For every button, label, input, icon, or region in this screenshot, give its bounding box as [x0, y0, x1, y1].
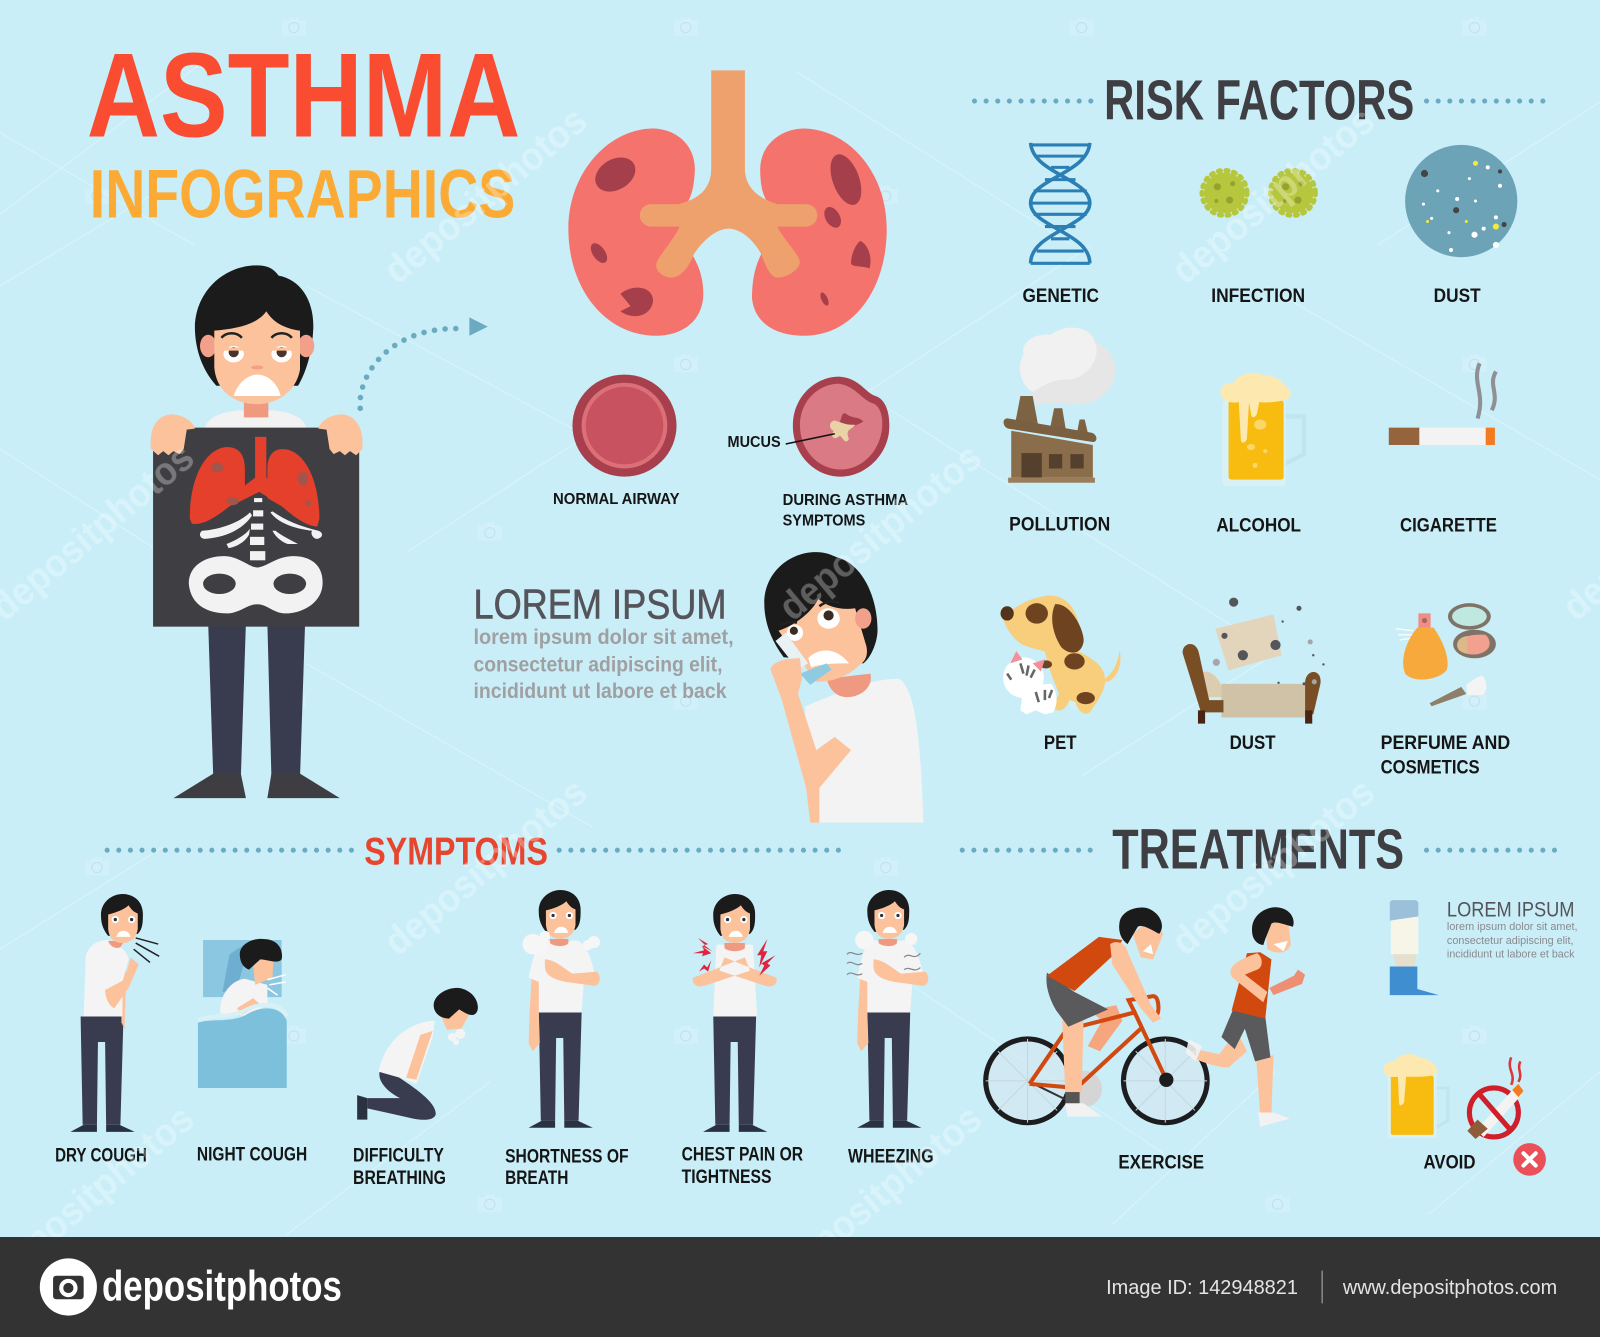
- shirt: [1047, 937, 1122, 991]
- logo camera: [40, 1258, 97, 1316]
- mattress: [1221, 684, 1305, 717]
- icon: perfume and cosmetics: COSMETICS: [1381, 757, 1480, 779]
- shorts: [1046, 973, 1108, 1027]
- dog markings: [1001, 603, 1095, 704]
- airway during asthma: DURING ASTHMA: [783, 492, 908, 509]
- icon: bed with pillow, dust: DUST: [1230, 732, 1276, 754]
- hands: [151, 414, 363, 455]
- symptom: night cough: NIGHT COUGH: [197, 1143, 307, 1165]
- icon: dust particles: DUST: [1434, 285, 1481, 307]
- dog head: [1003, 596, 1080, 657]
- icon: beer mug, alcohol: ALCOHOL: [1216, 515, 1301, 537]
- airway during asthma: MUCUS: [728, 434, 781, 451]
- symptom: difficulty breathing: [353, 988, 478, 1189]
- face: [779, 599, 867, 682]
- trachea and bronchi: [640, 70, 817, 278]
- mattress pillow: [1201, 672, 1221, 697]
- inhaler: [776, 633, 808, 670]
- website: www.depositphotos.com: [1342, 1277, 1557, 1299]
- heading: risk factors: RISK FACTORS: [1104, 68, 1414, 131]
- back leg: [1088, 1005, 1122, 1051]
- head: [1133, 919, 1163, 959]
- flying pillow: [1215, 614, 1282, 671]
- icon: beer mug, alcohol: [1216, 373, 1304, 537]
- dotted arrow to lungs: [360, 317, 488, 408]
- lungs illustration: [568, 70, 887, 336]
- icon: viruses, infection: INFECTION: [1211, 285, 1305, 307]
- icon: factory, pollution: [1004, 328, 1115, 536]
- lorem ipsum text block: incididunt ut labore et back: [473, 679, 727, 703]
- hair: [195, 265, 313, 386]
- symptom: chest pain or tightness: [682, 894, 803, 1188]
- treatment text block: LOREM IPSUM: [1447, 898, 1574, 922]
- hair: [764, 552, 878, 663]
- icon: inhaler: [1390, 900, 1439, 995]
- symptom: wheezing: [847, 890, 934, 1167]
- airway during asthma: [728, 377, 908, 530]
- eyes: [781, 601, 840, 641]
- chain ring: [1065, 1071, 1102, 1107]
- lorem ipsum text block: consectetur adipiscing elit,: [473, 653, 722, 677]
- treatment text block: lorem ipsum dolor sit amet,: [1447, 921, 1578, 933]
- image id: Image ID: 142948821: [1106, 1277, 1298, 1299]
- leg: [1062, 1016, 1084, 1094]
- symptom: night cough: [197, 939, 307, 1165]
- symptom: wheezing: WHEEZING: [848, 1145, 934, 1167]
- normal airway: [553, 375, 680, 508]
- person holding x-ray: [151, 265, 363, 798]
- front leg: [1256, 1055, 1273, 1115]
- arm: [1110, 942, 1161, 1023]
- watermarks: depositphotos: [771, 436, 990, 629]
- headboard: [1183, 644, 1223, 712]
- airway during asthma: SYMPTOMS: [783, 513, 865, 530]
- heading: symptoms: SYMPTOMS: [364, 830, 548, 873]
- person using inhaler: [764, 552, 923, 823]
- heading: treatments: TREATMENTS: [1112, 818, 1404, 881]
- illustration: cyclist: [986, 907, 1207, 1123]
- arm and hand: [770, 658, 851, 823]
- legs and shoes: [208, 623, 305, 778]
- symptom: shortness of breath: BREATH: [505, 1167, 568, 1189]
- mouth: [808, 651, 849, 667]
- watermarks: depositphotos: [1164, 771, 1383, 964]
- wheels: [986, 1039, 1207, 1123]
- face: [214, 311, 300, 404]
- shirt: [205, 410, 306, 428]
- title: INFOGRAPHICS: [90, 156, 515, 232]
- footboard: [1305, 672, 1321, 714]
- title: ASTHMA: [87, 30, 520, 163]
- symptom: chest pain or tightness: TIGHTNESS: [682, 1166, 771, 1188]
- nose: [251, 365, 263, 369]
- watermarks: depositphotos: [376, 99, 595, 293]
- left lung: [568, 129, 703, 336]
- icon: viruses, infection: [1202, 170, 1315, 307]
- smoke cloud: [1020, 328, 1115, 406]
- icon: DNA, genetic: GENETIC: [1022, 285, 1099, 307]
- ribs and spine: [200, 498, 322, 560]
- chimneys: [1015, 396, 1089, 437]
- icon: perfume and cosmetics: [1381, 603, 1510, 779]
- building: [1011, 431, 1093, 478]
- normal airway: NORMAL AIRWAY: [553, 491, 680, 508]
- shirt: [805, 679, 923, 823]
- symptom: chest pain or tightness: CHEST PAIN OR: [682, 1143, 803, 1165]
- shorts: [1221, 1010, 1270, 1061]
- footer bar: [0, 1237, 1600, 1337]
- cat: [1003, 651, 1057, 714]
- other arm: [1269, 970, 1305, 995]
- icon: dog and cat, pet: [1001, 596, 1121, 754]
- icon: bed with pillow, dust: [1183, 598, 1325, 754]
- bent arm: [1230, 953, 1267, 1002]
- icon: dust particles: [1405, 145, 1517, 307]
- icon: no smoking: [1467, 1057, 1523, 1139]
- eyes: [221, 333, 293, 362]
- icon: DNA, genetic: [1022, 143, 1099, 307]
- symptom: shortness of breath: SHORTNESS OF: [505, 1145, 629, 1167]
- damaged spots: [588, 150, 871, 316]
- illustration: runner: [1186, 907, 1305, 1127]
- avoid label: AVOID: [1423, 1152, 1476, 1174]
- symptom: difficulty breathing: BREATHING: [353, 1167, 446, 1189]
- frame: [1030, 996, 1166, 1088]
- lorem ipsum text block: lorem ipsum dolor sit amet,: [473, 625, 734, 649]
- watermarks: depositphotos: [1164, 99, 1383, 293]
- icon: factory, pollution: POLLUTION: [1009, 514, 1110, 536]
- treatment text block: incididunt ut labore et back: [1447, 948, 1575, 960]
- lorem ipsum text block: [473, 580, 734, 703]
- treatment text block: [1447, 898, 1578, 960]
- x-ray lungs: [190, 437, 319, 527]
- icon: dog and cat, pet: PET: [1044, 732, 1077, 754]
- icon: perfume and cosmetics: PERFUME AND: [1381, 732, 1510, 754]
- symptom: dry cough: DRY COUGH: [55, 1144, 147, 1166]
- ear: [855, 608, 871, 629]
- dog body: [1043, 645, 1121, 714]
- icon: cigarette: CIGARETTE: [1400, 515, 1497, 537]
- neck: [827, 674, 871, 697]
- neck: [244, 400, 268, 417]
- logo wordmark: depositphotos: [102, 1262, 342, 1310]
- watermarks: depositphotos: [771, 1097, 990, 1291]
- icon: cigarette: [1389, 363, 1497, 537]
- title: [87, 30, 520, 232]
- lorem ipsum text block: LOREM IPSUM: [473, 580, 727, 627]
- tank top: [1232, 952, 1271, 1019]
- icon: avoid beer: [1384, 1054, 1448, 1138]
- symptom: dry cough: [55, 894, 159, 1166]
- watermarks: depositphotos: [376, 771, 595, 964]
- pelvis: [189, 556, 323, 613]
- symptom: difficulty breathing: DIFFICULTY: [353, 1144, 444, 1166]
- right lung: [752, 129, 887, 336]
- ears: [200, 335, 314, 357]
- x-ray film: [153, 428, 359, 627]
- symptom: shortness of breath: [505, 890, 629, 1189]
- back leg: [1196, 1031, 1247, 1068]
- icon: red cross: [1513, 1143, 1546, 1176]
- head: [1265, 919, 1291, 953]
- treatment text block: consectetur adipiscing elit,: [1447, 935, 1573, 947]
- mouth: [234, 375, 281, 396]
- exercise label: EXERCISE: [1118, 1152, 1204, 1174]
